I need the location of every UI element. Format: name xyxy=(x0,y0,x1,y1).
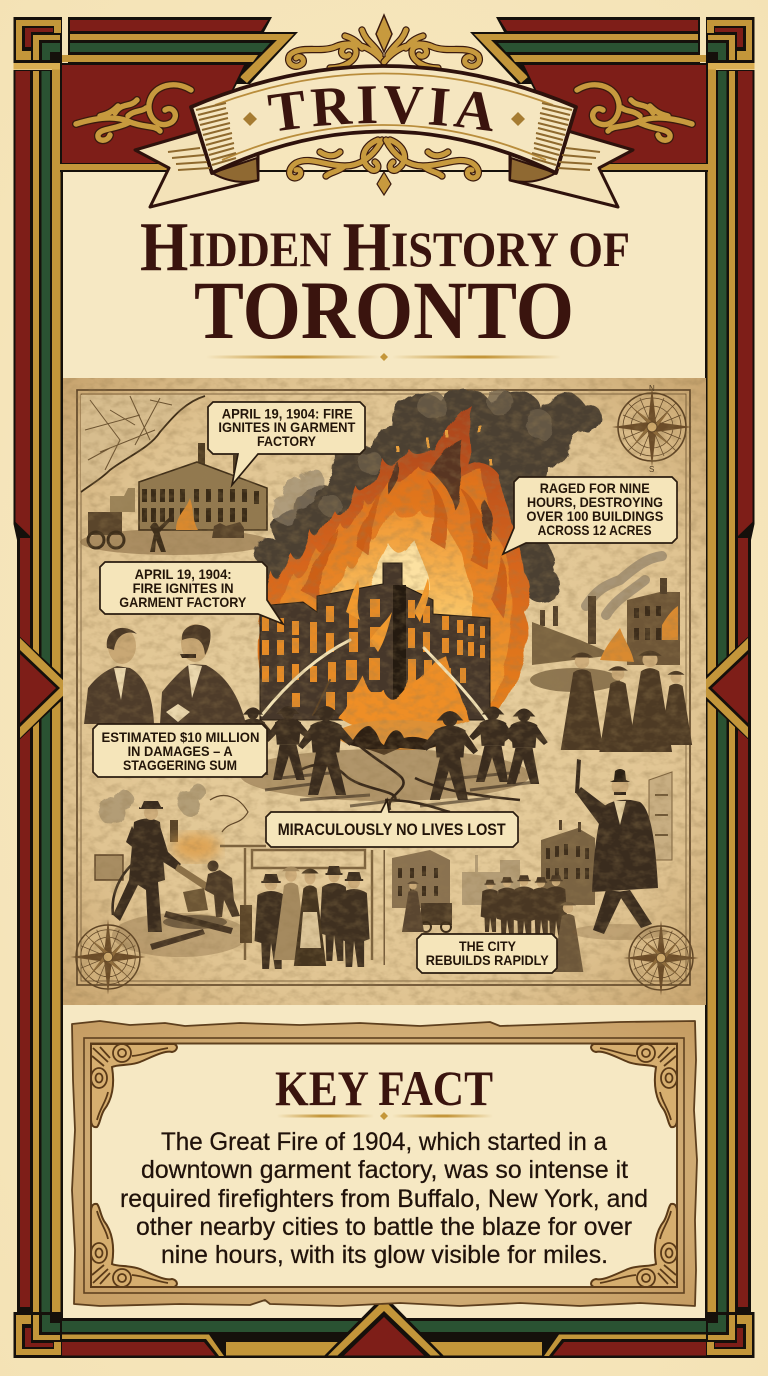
illustration border xyxy=(77,390,690,985)
ribbon hatching xyxy=(168,103,600,170)
ornament: bottom crest xyxy=(290,140,478,195)
engraving grain overlay xyxy=(63,378,706,1005)
callout: april 19 1904 xyxy=(100,562,283,624)
smoke: lighter puffs xyxy=(319,389,554,516)
callout: fire ignites in garment factory: APRIL 19, 1904: FIRE xyxy=(222,406,353,422)
fire: ground flames and debris xyxy=(336,655,468,755)
callout: no lives lost: MIRACULOUSLY NO LIVES LOST xyxy=(278,821,506,839)
banner: ribbon with title: TRIVIA xyxy=(267,86,493,132)
ground shading xyxy=(240,749,535,806)
callout: fire ignites in garment factory xyxy=(208,402,365,485)
scene: man with raised baton xyxy=(572,759,672,940)
hoses on ground xyxy=(300,742,520,812)
compass: top right: N xyxy=(649,384,655,393)
smoke: pale wisps xyxy=(271,468,324,524)
body text: other nearby cities to battle the blaze for over xyxy=(136,1213,632,1241)
callout: fire ignites in garment factory: FACTORY xyxy=(257,433,317,449)
callout: estimated damages xyxy=(93,724,267,777)
callout: estimated damages: IN DAMAGES – A xyxy=(128,743,233,759)
body text: required firefighters from Buffalo, New York, and xyxy=(120,1185,648,1213)
callout: city rebuilds: REBUILDS RAPIDLY xyxy=(426,952,549,968)
map: top left xyxy=(81,395,205,492)
title: Hidden History of: IDDEN xyxy=(188,221,343,277)
compass: bottom left xyxy=(70,919,146,995)
callout: raged for nine hours: ACROSS 12 ACRES xyxy=(538,522,652,538)
compass: bottom right xyxy=(623,920,699,996)
body text: nine hours, with its glow visible for miles. xyxy=(161,1241,608,1269)
callout: city rebuilds: THE CITY xyxy=(459,938,517,954)
ribbon dots xyxy=(243,112,525,126)
title: Hidden History of: H xyxy=(343,209,391,286)
smoke puffs xyxy=(99,784,206,825)
ribbon main band xyxy=(191,66,576,173)
callout: fire ignites in garment factory: IGNITES IN GARMENT xyxy=(218,419,356,435)
ribbon tails xyxy=(135,131,633,207)
worker xyxy=(205,870,240,917)
scene: rebuilding town xyxy=(384,820,595,972)
compass: top right: S xyxy=(649,465,654,474)
compass: top right xyxy=(612,384,692,474)
callout: raged for nine hours: OVER 100 BUILDINGS xyxy=(526,508,663,524)
firefighters: right team xyxy=(422,706,548,800)
body text: The Great Fire of 1904, which started in a xyxy=(161,1128,607,1156)
firefighters: left team xyxy=(232,706,354,795)
body text xyxy=(120,1128,648,1269)
callout: no lives lost xyxy=(266,800,518,847)
man with hose xyxy=(113,801,181,932)
flames xyxy=(258,406,529,716)
callout: april 19 1904: APRIL 19, 1904: xyxy=(135,566,232,582)
banner: ribbon with title xyxy=(134,64,634,208)
scene: group of survivors xyxy=(220,846,372,969)
callout: raged for nine hours: HOURS, DESTROYING xyxy=(527,494,663,510)
callout: raged for nine hours xyxy=(503,477,677,554)
banner title xyxy=(240,123,528,138)
ornament: top crest xyxy=(289,15,479,68)
planks xyxy=(150,911,233,950)
heading: KEY FACT xyxy=(275,1060,493,1116)
torn parchment xyxy=(72,1021,697,1306)
callout: april 19 1904: FIRE IGNITES IN xyxy=(133,580,234,596)
building: burning factory xyxy=(260,563,490,720)
scene: factory with first flames xyxy=(80,443,270,555)
callout: city rebuilds xyxy=(417,934,557,973)
hose streams xyxy=(262,640,487,720)
title: Toronto: TORONTO xyxy=(194,264,574,356)
scene: two officials xyxy=(84,624,246,724)
callout: raged for nine hours: RAGED FOR NINE xyxy=(540,480,650,496)
title: Hidden History of: ISTORY OF xyxy=(391,221,630,277)
title: Hidden History of: H xyxy=(140,209,188,286)
ornament: side flourishes on red xyxy=(76,85,692,140)
callout: estimated damages: ESTIMATED $10 MILLION xyxy=(102,729,260,745)
body text: downtown garment factory, was so intense it xyxy=(141,1156,628,1184)
panel: key fact xyxy=(72,1021,697,1306)
inner rules xyxy=(84,1038,684,1293)
corner flourishes xyxy=(91,1044,677,1287)
panel: fire illustration xyxy=(63,378,706,1005)
callout: april 19 1904: GARMENT FACTORY xyxy=(119,594,247,610)
smoke: dark cloud xyxy=(254,388,602,603)
callout: estimated damages: STAGGERING SUM xyxy=(123,757,237,773)
divider: title xyxy=(206,353,561,361)
divider xyxy=(277,1112,493,1120)
scene: firefighter and debris xyxy=(95,784,248,957)
scene: second factory and crowd xyxy=(530,556,692,752)
